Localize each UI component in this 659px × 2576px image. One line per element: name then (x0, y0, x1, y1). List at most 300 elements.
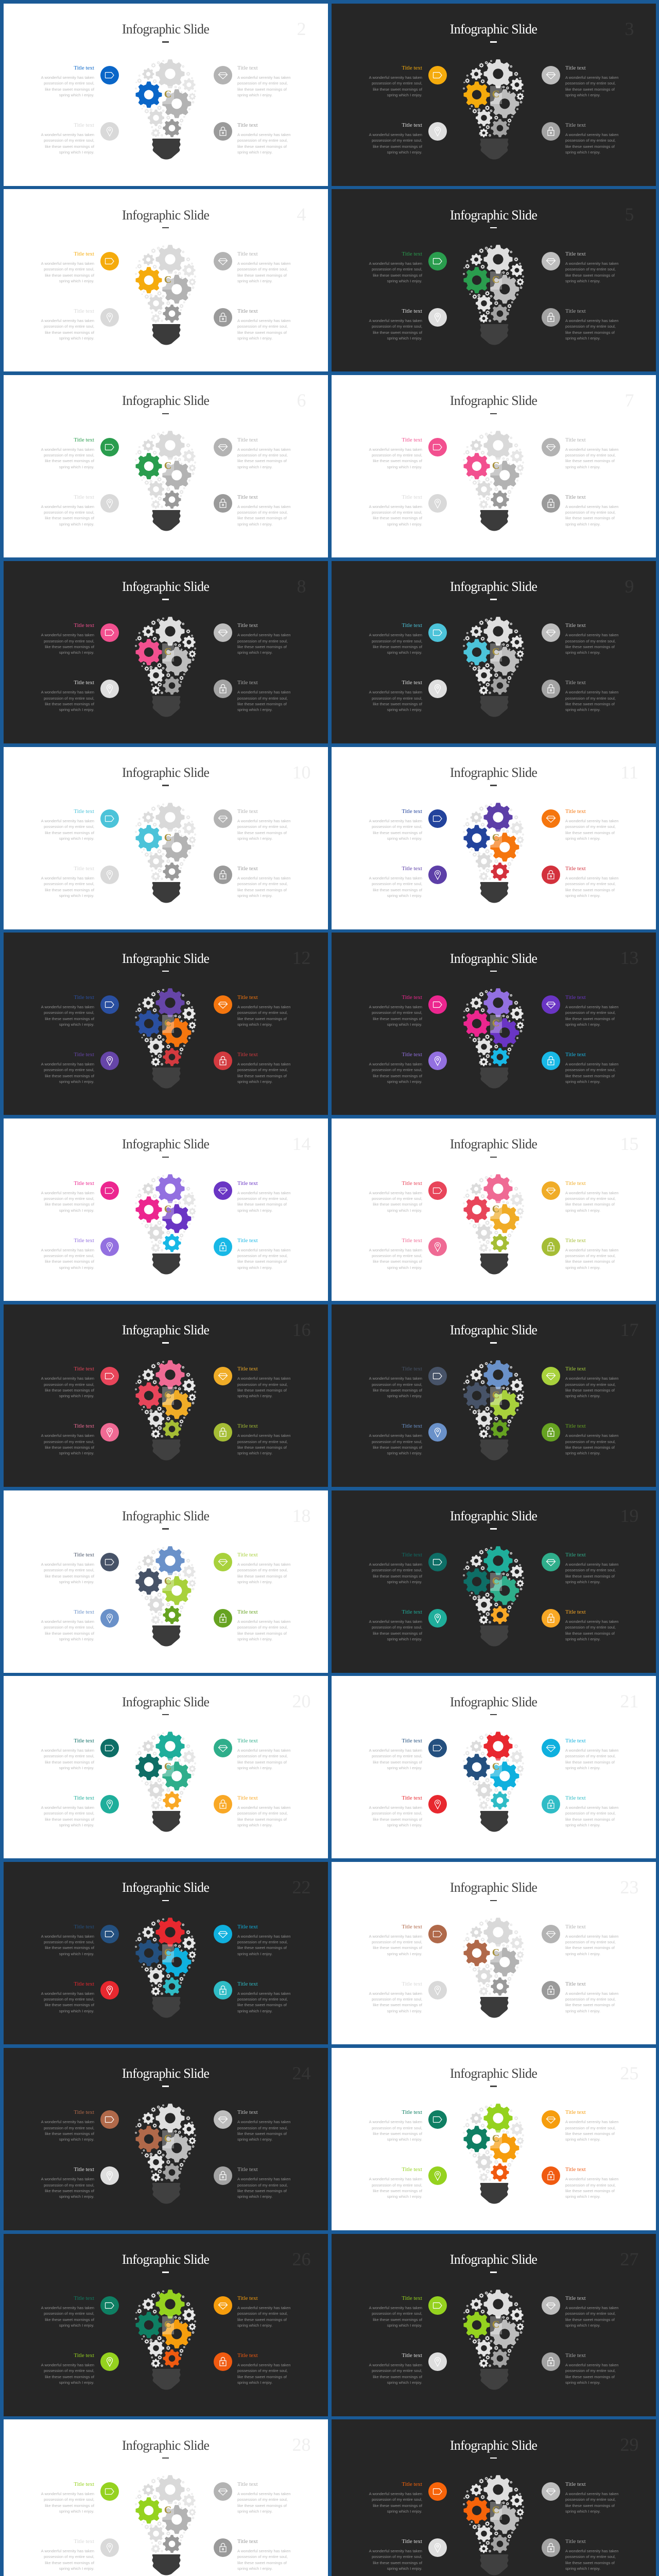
watermark: C (492, 1575, 499, 1587)
text: possession of my entire soul, (237, 1568, 288, 1572)
heading: Title text (237, 866, 258, 872)
slide 9 (332, 561, 656, 743)
text: A wonderful serenity has taken (565, 1562, 618, 1567)
callout: bottom right (542, 680, 626, 719)
text: spring which I enjoy. (59, 707, 94, 712)
callout: bottom left (34, 1980, 119, 2021)
callout: bottom right (213, 1795, 299, 1835)
text: spring which I enjoy. (565, 465, 600, 469)
icon: diamond (542, 995, 560, 1014)
icon: lock (213, 1980, 232, 1999)
icon: diamond (542, 438, 560, 456)
text: spring which I enjoy. (565, 893, 600, 898)
callout: bottom right (213, 1423, 299, 1463)
text: A wonderful serenity has taken (369, 132, 422, 137)
text (237, 2176, 290, 2200)
text: possession of my entire soul, (44, 882, 94, 886)
text: spring which I enjoy. (387, 2509, 422, 2514)
title: Infographic Slide (122, 1509, 209, 1523)
heading: Title text (565, 1795, 586, 1801)
title: Infographic Slide (122, 951, 209, 966)
heading: Title text (74, 2166, 94, 2173)
slide number: 9 (625, 576, 634, 597)
text: spring which I enjoy. (237, 1208, 272, 1213)
icon: tag (100, 1739, 119, 1757)
text: possession of my entire soul, (565, 1940, 616, 1944)
text: A wonderful serenity has taken (565, 1433, 618, 1438)
callout: top left (34, 2295, 119, 2335)
text: spring which I enjoy. (565, 1022, 600, 1027)
text: possession of my entire soul, (237, 1997, 288, 2002)
gear light bulb (460, 1541, 527, 1650)
heading: Title text (74, 494, 94, 500)
callout: top right (542, 1366, 626, 1405)
text: possession of my entire soul, (44, 453, 94, 457)
text: spring which I enjoy. (237, 650, 272, 655)
text: possession of my entire soul, (44, 1625, 94, 1630)
watermark (162, 1572, 174, 1591)
text: spring which I enjoy. (387, 465, 422, 469)
heading: Title text (74, 437, 94, 443)
text: A wonderful serenity has taken (237, 2549, 290, 2553)
callout: bottom left (362, 680, 447, 719)
text: possession of my entire soul, (237, 510, 288, 515)
watermark (490, 1387, 501, 1405)
text: A wonderful serenity has taken (565, 2549, 618, 2553)
text: A wonderful serenity has taken (565, 261, 618, 266)
callout: top right (542, 2481, 626, 2521)
heading: Title text (565, 622, 586, 629)
callout: top right (542, 808, 626, 848)
text: possession of my entire soul, (237, 267, 288, 272)
text (565, 2362, 618, 2386)
text (41, 1247, 94, 1270)
text: spring which I enjoy. (387, 2323, 422, 2328)
text: A wonderful serenity has taken (41, 633, 94, 637)
text: like these sweet mornings of (373, 1817, 422, 1822)
icon: tag (100, 66, 119, 84)
text: like these sweet mornings of (45, 1445, 94, 1450)
text: spring which I enjoy. (387, 279, 422, 283)
title: Infographic Slide (450, 1509, 537, 1523)
heading: Title text (402, 2109, 422, 2115)
icon: tag (100, 809, 119, 828)
watermark: C (164, 1389, 171, 1401)
text: like these sweet mornings of (237, 2131, 287, 2136)
text: possession of my entire soul, (44, 81, 94, 86)
callout: bottom right (542, 866, 626, 905)
icon: tag (428, 623, 447, 642)
text (565, 318, 618, 341)
callout: top right (542, 251, 626, 291)
text: possession of my entire soul, (565, 138, 616, 143)
text (369, 689, 422, 713)
icon: tag (100, 2296, 119, 2315)
text: spring which I enjoy. (565, 2194, 600, 2199)
text (369, 2305, 422, 2329)
text: A wonderful serenity has taken (237, 1248, 290, 1252)
watermark: C (492, 274, 499, 285)
text: spring which I enjoy. (565, 1265, 600, 1270)
heading: Title text (237, 680, 258, 686)
text: A wonderful serenity has taken (369, 2306, 422, 2310)
text: possession of my entire soul, (372, 510, 422, 515)
text: A wonderful serenity has taken (41, 504, 94, 509)
callout: top right (213, 1180, 299, 1220)
callout: top right (542, 1180, 626, 1220)
text: like these sweet mornings of (237, 2003, 287, 2007)
text: spring which I enjoy. (237, 150, 272, 155)
text: spring which I enjoy. (387, 1580, 422, 1584)
icon: lock (213, 2352, 232, 2371)
text: A wonderful serenity has taken (369, 2549, 422, 2553)
text: like these sweet mornings of (565, 1817, 615, 1822)
heading: Title text (237, 308, 258, 314)
heading: Title text (402, 1366, 422, 1372)
text: A wonderful serenity has taken (565, 447, 618, 451)
text: possession of my entire soul, (372, 138, 422, 143)
slide 5 (332, 189, 656, 371)
callout: bottom right (542, 1795, 626, 1835)
heading: Title text (402, 680, 422, 686)
text (565, 1562, 618, 1585)
text: possession of my entire soul, (565, 2368, 616, 2373)
text: possession of my entire soul, (44, 1811, 94, 1816)
text: possession of my entire soul, (372, 696, 422, 701)
slide 19 (332, 1490, 656, 1672)
text: possession of my entire soul, (237, 1067, 288, 1072)
text: possession of my entire soul, (44, 138, 94, 143)
heading: Title text (402, 251, 422, 257)
text (237, 1061, 290, 1084)
text (369, 818, 422, 842)
text: like these sweet mornings of (237, 516, 287, 520)
heading: Title text (402, 2538, 422, 2545)
text: like these sweet mornings of (565, 1760, 615, 1765)
text: spring which I enjoy. (565, 836, 600, 841)
text: like these sweet mornings of (565, 330, 615, 335)
text: possession of my entire soul, (565, 1568, 616, 1572)
text: like these sweet mornings of (565, 1388, 615, 1393)
text: like these sweet mornings of (45, 702, 94, 706)
text: A wonderful serenity has taken (369, 2363, 422, 2367)
text (369, 875, 422, 899)
callout: bottom right (542, 1609, 626, 1649)
text: like these sweet mornings of (45, 459, 94, 463)
text: like these sweet mornings of (45, 1574, 94, 1579)
heading: Title text (237, 808, 258, 815)
text (237, 818, 290, 842)
text: like these sweet mornings of (45, 1388, 94, 1393)
text (369, 2548, 422, 2571)
text: A wonderful serenity has taken (41, 318, 94, 323)
icon: diamond (542, 1553, 560, 1571)
text: spring which I enjoy. (387, 1208, 422, 1213)
text: like these sweet mornings of (373, 1574, 422, 1579)
text: possession of my entire soul, (372, 1253, 422, 1258)
icon: diamond (213, 2110, 232, 2129)
icon: tag (428, 66, 447, 84)
text: like these sweet mornings of (45, 831, 94, 835)
text: possession of my entire soul, (372, 81, 422, 86)
title: Infographic Slide (122, 1323, 209, 1337)
heading: Title text (402, 1609, 422, 1615)
callout: top right (542, 2109, 626, 2149)
text: possession of my entire soul, (44, 1439, 94, 1444)
text: A wonderful serenity has taken (41, 2306, 94, 2310)
callout: bottom right (542, 308, 626, 348)
text (565, 1933, 618, 1957)
icon: bulb (100, 1052, 119, 1070)
heading: Title text (402, 1738, 422, 1744)
icon: diamond (542, 623, 560, 642)
text (41, 2548, 94, 2571)
text: A wonderful serenity has taken (41, 876, 94, 880)
text: possession of my entire soul, (44, 1382, 94, 1387)
text: spring which I enjoy. (237, 2509, 272, 2514)
heading: Title text (565, 994, 586, 1001)
text: like these sweet mornings of (373, 1445, 422, 1450)
text: like these sweet mornings of (237, 1388, 287, 1393)
icon: bulb (100, 1609, 119, 1628)
heading: Title text (74, 1795, 94, 1801)
text: A wonderful serenity has taken (565, 1062, 618, 1066)
text: possession of my entire soul, (372, 453, 422, 457)
icon: diamond (542, 1181, 560, 1199)
title: Infographic Slide (450, 1880, 537, 1895)
text: spring which I enjoy. (237, 1451, 272, 1455)
heading: Title text (74, 2352, 94, 2359)
gear light bulb (132, 1356, 199, 1464)
text: possession of my entire soul, (237, 2126, 288, 2130)
heading: Title text (402, 1238, 422, 1244)
text (41, 1619, 94, 1642)
icon: bulb (100, 122, 119, 141)
watermark: C (164, 89, 171, 100)
text (565, 1991, 618, 2014)
watermark (490, 1015, 501, 1033)
icon: lock (542, 866, 560, 884)
text: possession of my entire soul, (565, 882, 616, 886)
callout: top left (362, 2295, 447, 2335)
icon: bulb (428, 1052, 447, 1070)
slide number: 26 (292, 2248, 311, 2269)
callout: top left (34, 1366, 119, 1405)
text: possession of my entire soul, (372, 2554, 422, 2559)
text: spring which I enjoy. (565, 707, 600, 712)
callout: bottom left (362, 2166, 447, 2206)
text: possession of my entire soul, (237, 324, 288, 329)
icon: tag (100, 2110, 119, 2129)
slide number: 17 (620, 1319, 638, 1340)
callout: top left (362, 2109, 447, 2149)
text: like these sweet mornings of (373, 1945, 422, 1950)
text: spring which I enjoy. (387, 2137, 422, 2142)
heading: Title text (237, 1795, 258, 1801)
text: A wonderful serenity has taken (41, 1433, 94, 1438)
heading: Title text (237, 2109, 258, 2115)
text: like these sweet mornings of (565, 87, 615, 92)
title: Infographic Slide (122, 1137, 209, 1151)
callout: bottom right (542, 494, 626, 534)
icon: lock (213, 2166, 232, 2185)
text: like these sweet mornings of (45, 1202, 94, 1207)
slide number: 29 (620, 2434, 638, 2455)
text: A wonderful serenity has taken (369, 1619, 422, 1624)
text: spring which I enjoy. (565, 2323, 600, 2328)
text: possession of my entire soul, (565, 510, 616, 515)
text: spring which I enjoy. (237, 93, 272, 97)
callout: bottom left (369, 122, 447, 155)
text: A wonderful serenity has taken (565, 876, 618, 880)
heading: Title text (565, 2295, 586, 2301)
text: possession of my entire soul, (565, 2497, 616, 2502)
text: A wonderful serenity has taken (41, 1562, 94, 1567)
text: spring which I enjoy. (237, 1766, 272, 1770)
text (369, 132, 422, 155)
slide 26 (3, 2234, 327, 2416)
icon: lock (542, 1609, 560, 1628)
text: spring which I enjoy. (387, 336, 422, 341)
title: Infographic Slide (450, 2438, 537, 2453)
heading: Title text (237, 437, 258, 443)
icon: bulb (428, 1423, 447, 1442)
text: spring which I enjoy. (237, 2380, 272, 2385)
text: A wonderful serenity has taken (369, 819, 422, 823)
icon: bulb (100, 1238, 119, 1256)
text: like these sweet mornings of (237, 144, 287, 149)
heading: Title text (565, 1609, 586, 1615)
text: possession of my entire soul, (44, 1196, 94, 1201)
text: A wonderful serenity has taken (237, 690, 290, 694)
text: spring which I enjoy. (387, 650, 422, 655)
text: spring which I enjoy. (59, 465, 94, 469)
text: like these sweet mornings of (565, 2561, 615, 2565)
text: like these sweet mornings of (237, 1817, 287, 1822)
callout: bottom left (34, 1609, 119, 1649)
callout: top left (362, 1552, 447, 1591)
text: possession of my entire soul, (565, 696, 616, 701)
icon: tag (428, 995, 447, 1014)
text: A wonderful serenity has taken (565, 2363, 618, 2367)
text: spring which I enjoy. (237, 1265, 272, 1270)
text: A wonderful serenity has taken (237, 633, 290, 637)
text: A wonderful serenity has taken (237, 1562, 290, 1567)
text: like these sweet mornings of (373, 2375, 422, 2379)
text: possession of my entire soul, (565, 267, 616, 272)
slide number: 13 (620, 947, 638, 968)
text: possession of my entire soul, (372, 324, 422, 329)
text: A wonderful serenity has taken (369, 876, 422, 880)
icon: tag (428, 1925, 447, 1943)
watermark: C (164, 1204, 171, 1215)
watermark (490, 2316, 501, 2334)
text: A wonderful serenity has taken (237, 1748, 290, 1753)
callout: top left (362, 1180, 447, 1220)
callout: top left (34, 437, 119, 476)
icon: lock (542, 1423, 560, 1442)
title: Infographic Slide (122, 393, 209, 408)
heading: Title text (237, 2538, 258, 2545)
text: possession of my entire soul, (237, 1196, 288, 1201)
heading: Title text (402, 2295, 422, 2301)
text: like these sweet mornings of (45, 1817, 94, 1822)
text: spring which I enjoy. (565, 150, 600, 155)
callout: top right (213, 1552, 299, 1591)
slide number: 27 (620, 2248, 638, 2269)
callout: bottom left (34, 2166, 119, 2206)
text: A wonderful serenity has taken (369, 1433, 422, 1438)
text: A wonderful serenity has taken (369, 504, 422, 509)
icon: bulb (428, 1795, 447, 1814)
slide 27 (332, 2234, 656, 2416)
text: like these sweet mornings of (45, 2131, 94, 2136)
text: possession of my entire soul, (372, 2126, 422, 2130)
heading: Title text (74, 808, 94, 815)
heading: Title text (565, 1238, 586, 1244)
watermark (162, 2316, 174, 2334)
text: A wonderful serenity has taken (369, 1005, 422, 1009)
heading: Title text (402, 1052, 422, 1058)
text: possession of my entire soul, (44, 1010, 94, 1015)
heading: Title text (74, 2481, 94, 2487)
text: like these sweet mornings of (565, 1945, 615, 1950)
text: A wonderful serenity has taken (369, 1062, 422, 1066)
text (369, 2491, 422, 2514)
text: like these sweet mornings of (45, 273, 94, 278)
text: A wonderful serenity has taken (237, 1619, 290, 1624)
text: spring which I enjoy. (237, 465, 272, 469)
text: A wonderful serenity has taken (565, 1748, 618, 1753)
heading: Title text (565, 1980, 586, 1987)
callout: bottom left (362, 494, 447, 534)
callout: bottom right (542, 1423, 626, 1463)
icon: lock (213, 866, 232, 884)
heading: Title text (565, 1924, 586, 1930)
heading: Title text (237, 1052, 258, 1058)
text: like these sweet mornings of (373, 2561, 422, 2565)
text (237, 318, 290, 341)
text: spring which I enjoy. (565, 2137, 600, 2142)
watermark (162, 1758, 174, 1776)
heading: Title text (565, 122, 586, 128)
callout: top left (41, 65, 119, 97)
text: like these sweet mornings of (45, 1945, 94, 1950)
text: A wonderful serenity has taken (369, 1248, 422, 1252)
text (369, 1619, 422, 1642)
icon: tag (100, 1925, 119, 1943)
text: like these sweet mornings of (565, 1202, 615, 1207)
icon: lock (214, 308, 232, 327)
heading: Title text (237, 2295, 258, 2301)
icon: diamond (213, 1553, 232, 1571)
text (41, 1991, 94, 2014)
heading: Title text (74, 866, 94, 872)
callout: bottom left (362, 866, 447, 905)
callout: top right (214, 65, 290, 97)
text: possession of my entire soul, (372, 824, 422, 829)
text: possession of my entire soul, (237, 2311, 288, 2316)
title: Infographic Slide (122, 22, 209, 37)
text (41, 1748, 94, 1771)
callout: top left (34, 1924, 119, 1963)
text (237, 1748, 290, 1771)
text: A wonderful serenity has taken (369, 1805, 422, 1810)
text: like these sweet mornings of (45, 2503, 94, 2508)
heading: Title text (402, 2481, 422, 2487)
text: A wonderful serenity has taken (237, 2120, 290, 2124)
heading: Title text (74, 2538, 94, 2545)
